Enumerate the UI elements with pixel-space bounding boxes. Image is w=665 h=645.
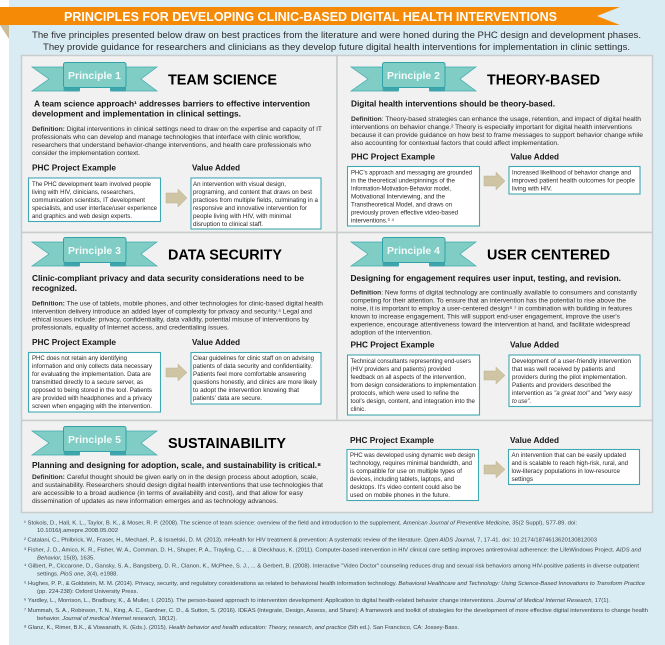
heading: data security: DATA SECURITY (168, 246, 282, 264)
box: PHC example: (HIV providers and patients) provided (350, 366, 452, 373)
title banner (0, 7, 620, 39)
label: value added: Value Added (510, 341, 559, 350)
arrow (166, 189, 187, 207)
definition: professionals who can develop and manage technologies that interface with clinic workflow, (32, 134, 301, 141)
references: ⁶ Yardley, L., Morrison, L., Bradbury, K., & Muller, I. (2015). The person-based approach to intervention development: Application to digital health-related behavior change interventions. Journal of Medical Internet Research, 17(1). (24, 598, 610, 604)
box: PHC example: PHC does not retain any identifying (32, 355, 128, 362)
box: PHC example: transmitted directly to a secure server, as (32, 379, 143, 386)
box: value added: low-literacy populations in low-resource (512, 468, 621, 475)
arrow (166, 364, 187, 381)
box: value added (509, 166, 640, 194)
box: PHC example: in the theoretical underpinnings of the (351, 178, 456, 184)
box: PHC example (28, 178, 160, 222)
intro text: They provide guidance for researchers and clinicians as they develop future digital health interventions for implementation in clinic settings. (43, 42, 630, 53)
panel: principle 3 data security (22, 232, 337, 420)
box: value added: people living with HIV, with minimal (193, 213, 291, 220)
definition: researchers that understand behavior-change interventions, and health care professionals who (32, 142, 311, 149)
box: value added: patients' data are secure. (193, 395, 262, 402)
definition: consider the implementation context. (32, 150, 140, 157)
ribbon: principle 5 (32, 426, 157, 456)
definition: Definition: Careful thought should be given early on in the design process about adoption, scale, (32, 474, 318, 481)
subheading: Designing for engagement requires user input, testing, and revision. (350, 274, 621, 283)
definition: professionals, equality of Internet access, and credentialing issues. (32, 324, 229, 332)
heading: team science: TEAM SCIENCE (168, 72, 277, 88)
box: value added (509, 355, 640, 406)
box: PHC example: clinic. (350, 406, 366, 413)
definition (350, 290, 638, 336)
box: PHC example: feedback on all aspects of the intervention, (350, 374, 466, 381)
panel: principle 2 theory-based (337, 56, 652, 232)
box: value added: improved patient health outcomes for people (512, 178, 636, 184)
box: PHC example: Transtheoretical Model, and draws on (351, 202, 453, 208)
references: (pp. 224-238): Oxford University Press. (37, 589, 138, 595)
box: value added: to use". (512, 398, 531, 405)
box: PHC example: information and only collects data necessary (32, 363, 153, 370)
box: value added: intervention as "a great tool" and "very easy (512, 390, 633, 397)
box: PHC example (28, 352, 160, 412)
box: PHC example: desktops. It's video content could also be (350, 484, 462, 491)
ribbon: principle 3: Principle 3 (68, 245, 121, 257)
references: behavior. Journal of medical Internet research, 18(12). (37, 616, 177, 622)
box: value added: Patients feel more comfortable answering (193, 371, 307, 378)
references (24, 520, 648, 631)
box: PHC example: Information-Motivation-Behavior model, (351, 186, 451, 192)
definition: intervention delivery introduce an added layer of complexity for privacy and security.⁵ Legal and (32, 308, 312, 316)
definition: Definition: The use of tablets, mobile phones, and other technologies for clinic-based digital health (32, 300, 323, 308)
box: PHC example: protocols, which were used to refine the (350, 390, 460, 397)
definition: and sustainability. Researchers should design digital health interventions that use technologies that (32, 482, 323, 489)
box: PHC example: PHC's approach and messaging are grounded (351, 170, 473, 176)
heading: theory-based: THEORY-BASED (487, 72, 600, 88)
box: value added: responsive and innovative intervention for (193, 205, 307, 212)
panel: principle 5 sustainability (22, 420, 652, 512)
ribbon: principle 4: Principle 4 (387, 245, 440, 257)
box: PHC example (347, 450, 478, 500)
references: ⁸ Glanz, K., Rimer, B.K., & Viswanath, K. (Eds.). (2015). Health behavior and health education: Theory, research, and practice (5th ed.). San Francisco, CA: Jossey-Bass. (24, 625, 459, 631)
box: value added: patients of data security and confidentiality. (193, 363, 312, 370)
box: PHC example: from design considerations to implementation (350, 382, 477, 389)
box: value added: settings (512, 476, 533, 483)
box: value added: providers during the pilot implementation. (512, 374, 627, 381)
box: PHC example: devices, including tablets, laptops, and (350, 476, 455, 483)
box: PHC example: opposed to being stored in the tool. Patients (32, 387, 152, 394)
references: Behavior, 15(8), 1635. (37, 556, 95, 562)
subheading (32, 100, 310, 118)
subheading (32, 274, 305, 293)
label: PHC project example: PHC Project Example (32, 338, 117, 347)
box: PHC example: technology, requires minimal bandwidth, and (350, 460, 473, 467)
box: PHC example: used on mobile phones in the future. (350, 492, 450, 499)
box: PHC example: tool's design, content, and integration into the (350, 398, 476, 405)
label: value added: Value Added (510, 152, 559, 162)
intro text (32, 30, 641, 53)
references: ⁷ Mummah, S. A., Robinson, T. N., King, A. C., Gardner, C. D., & Sutton, S. (2016). IDEAS (Integrate, Design, Assess, and Share): A framework and toolkit of strategies for the development of more effective digital interventions to change health (24, 608, 648, 614)
definition: Definition: New forms of digital technology are continually available to consumers and constantly (350, 290, 638, 296)
box: PHC example: screen when engaging with the intervention. (32, 403, 152, 410)
subheading: recognized. (32, 284, 77, 293)
box: PHC example: is compatible for use on multiple types of (350, 468, 462, 475)
references: ¹ Stokols, D., Hall, K. L., Taylor, B. K., & Moser, R. P. (2008). The science of team science: overview of the field and introduction to the supplement. American Journal of Preventive Medicine, 35(2 Suppl), S77-89. doi: (24, 520, 577, 526)
heading: sustainability: SUSTAINABILITY (168, 435, 286, 452)
subheading: Clinic-compliant privacy and data security considerations need to be (32, 274, 305, 283)
box: PHC example (348, 355, 480, 415)
box: PHC example: interventions.³ ⁴ (351, 217, 394, 224)
definition: also accounting for contextual factors that could affect implementation. (351, 140, 559, 147)
definition: noise, it is important to employ a user-centered design⁶ ⁷ in combination with building in features (350, 306, 632, 312)
box: value added (191, 178, 321, 229)
references: ⁵ Hughes, P. P., & Goldstein, M. M. (2014). Privacy, security, and regulatory considerations as related to behavioral health information technology. Behavioral Healthcare and Technology: Using Science-Based Innovations to Transform Practice (24, 581, 645, 587)
subheading: Planning and designing for adoption, scale, and sustainability is critical.⁸ (32, 461, 321, 470)
definition: adoption of the intervention. (350, 330, 432, 336)
ribbon: principle 1 (32, 62, 157, 92)
definition: known to increase engagement. This will support end-user engagement, improve the user's (350, 314, 620, 320)
definition (32, 474, 323, 505)
box: value added: Increased likelihood of behavior change and (512, 170, 632, 176)
definition: ethical issues include: privacy, confidentiality, data validity, potential misuse of interventions by (32, 316, 310, 324)
subheading: A team science approach¹ addresses barriers to effective intervention (34, 100, 310, 108)
box: value added: questions honestly, and clinics are more likely (193, 379, 318, 386)
definition: Definition: Digital interventions in clinical settings need to draw on the expertise and capacity of IT (32, 126, 322, 133)
ribbon: principle 2: Principle 2 (387, 70, 440, 82)
label: value added: Value Added (192, 164, 240, 172)
references: settings. PloS one, 3(4), e1988. (37, 572, 118, 578)
definition: experience, encourage attentiveness toward the intervention at hand, and facilitate widespread (350, 322, 630, 328)
label: value added: Value Added (192, 338, 240, 347)
definition: are accessible to a broad audience (in terms of availability and cost), and that allow for easy (32, 490, 304, 497)
arrow (484, 461, 505, 478)
box: value added: disruption to clinical staff. (193, 221, 263, 228)
box: PHC example: specialists, and user interface/user experience (32, 205, 158, 212)
box: value added: to adopt the intervention knowing that (193, 387, 299, 394)
box: PHC example: Motivational Interviewing, and the (351, 194, 446, 200)
definition: because it can provide guidance on how best to frame messages to support behavior change while (351, 132, 643, 139)
box: value added: Development of a user-friendly intervention (512, 358, 632, 365)
box: PHC example: The PHC development team involved people (32, 181, 152, 188)
panel: principle 4 user centered (337, 232, 652, 420)
panel: principle 1 team science (22, 56, 337, 232)
box: value added: that was well received by patients and (512, 366, 616, 373)
box: value added: Patients and providers described the (512, 382, 612, 389)
references: ³ Fisher, J. D., Amico, K. R., Fisher, W. A., Cornman, D. H., Shuper, P. A., Trayling, C., ... & Dieckhaus, K. (2011). Computer-based intervention in HIV clinical care setting improves antiretroviral adherence: the LifeWindows Project. AIDS and (24, 548, 642, 554)
box: value added: An intervention with visual design, (193, 181, 286, 188)
label: PHC project example: PHC Project Example (351, 152, 436, 162)
box: value added (508, 450, 640, 484)
box: PHC example: living with HIV, clinicians, researchers, (32, 189, 135, 196)
title: PRINCIPLES FOR DEVELOPING CLINIC-BASED DIGITAL HEALTH INTERVENTIONS (64, 10, 557, 24)
references: 10.1016/j.amepre.2008.05.002 (37, 528, 118, 534)
definition: dissemination of updates as new information emerges and as technology advances. (32, 498, 278, 505)
definition (32, 126, 322, 157)
box: value added: An intervention that can be easily updated (512, 452, 627, 459)
label: PHC project example: PHC Project Example (350, 436, 435, 445)
definition: competing for their attention. To ensure that an intervention has the potential to rise above the (350, 298, 626, 304)
label: PHC project example: PHC Project Example (350, 341, 435, 350)
box: value added: and is scalable to reach high-risk, rural, and (512, 460, 629, 467)
ribbon: principle 2 (351, 62, 476, 92)
subheading: Digital health interventions should be theory-based. (351, 100, 555, 108)
definition (32, 300, 323, 332)
box: PHC example: Technical consultants representing end-users (350, 358, 471, 365)
heading: user centered: USER CENTERED (487, 246, 610, 264)
box: value added: practices from multiple fields, culminating in a (193, 197, 319, 204)
intro text: The five principles presented below draw on best practices from the literature and were honed during the PHC design and development phases. (32, 30, 641, 41)
definition (351, 116, 643, 147)
box: PHC example: are provided with headphones and a privacy (32, 395, 153, 402)
box: value added: programing, and content that draws on best (193, 189, 312, 196)
box: value added: living with HIV. (512, 186, 552, 192)
ribbon: principle 1: Principle 1 (68, 70, 121, 82)
definition: interventions on behavior change.² Theory is especially important for digital health interventions (351, 124, 632, 131)
arrow (484, 367, 505, 384)
box: PHC example: and graphics and web design experts. (32, 213, 132, 220)
box: PHC example: for evaluating the implementation. Data are (32, 371, 152, 378)
label: PHC project example: PHC Project Example (32, 164, 117, 172)
box: value added: Clear guidelines for clinic staff on on advising (193, 355, 315, 362)
box: PHC example: communication scientists, IT development (32, 197, 145, 204)
ribbon: principle 5: Principle 5 (68, 434, 121, 446)
box: PHC example (348, 166, 480, 226)
label: value added: Value Added (510, 436, 559, 445)
ribbon: principle 4 (351, 238, 476, 266)
ribbon: principle 3 (32, 238, 157, 266)
subheading: development and implementation in clinical settings. (32, 110, 241, 118)
box: PHC example: PHC was developed using dynamic web design (350, 452, 476, 459)
box: value added (191, 352, 321, 404)
arrow (484, 172, 505, 190)
definition: Definition: Theory-based strategies can enhance the usage, retention, and impact of digital health (351, 116, 641, 123)
references: ⁴ Gilbert, P., Ciccarone, D., Gansky, S. A., Bangsberg, D. R., Clanon, K., McPhee, S. J., ... & Gerbert, B. (2008). Interactive "Video Doctor" counseling reduces drug and sexual risk behaviors among HIV-positive patients in diverse outpatient (24, 564, 640, 570)
references: ² Catalani, C., Philbrick, W., Fraser, H., Mechael, P., & Israelski, D. M. (2013). mHealth for HIV treatment & prevention: A systematic review of the literature. Open AIDS Journal, 7, 17-41. doi: 10.2174/1874613620130812003 (24, 538, 597, 544)
box: PHC example: previously proven effective video-based (351, 209, 459, 216)
